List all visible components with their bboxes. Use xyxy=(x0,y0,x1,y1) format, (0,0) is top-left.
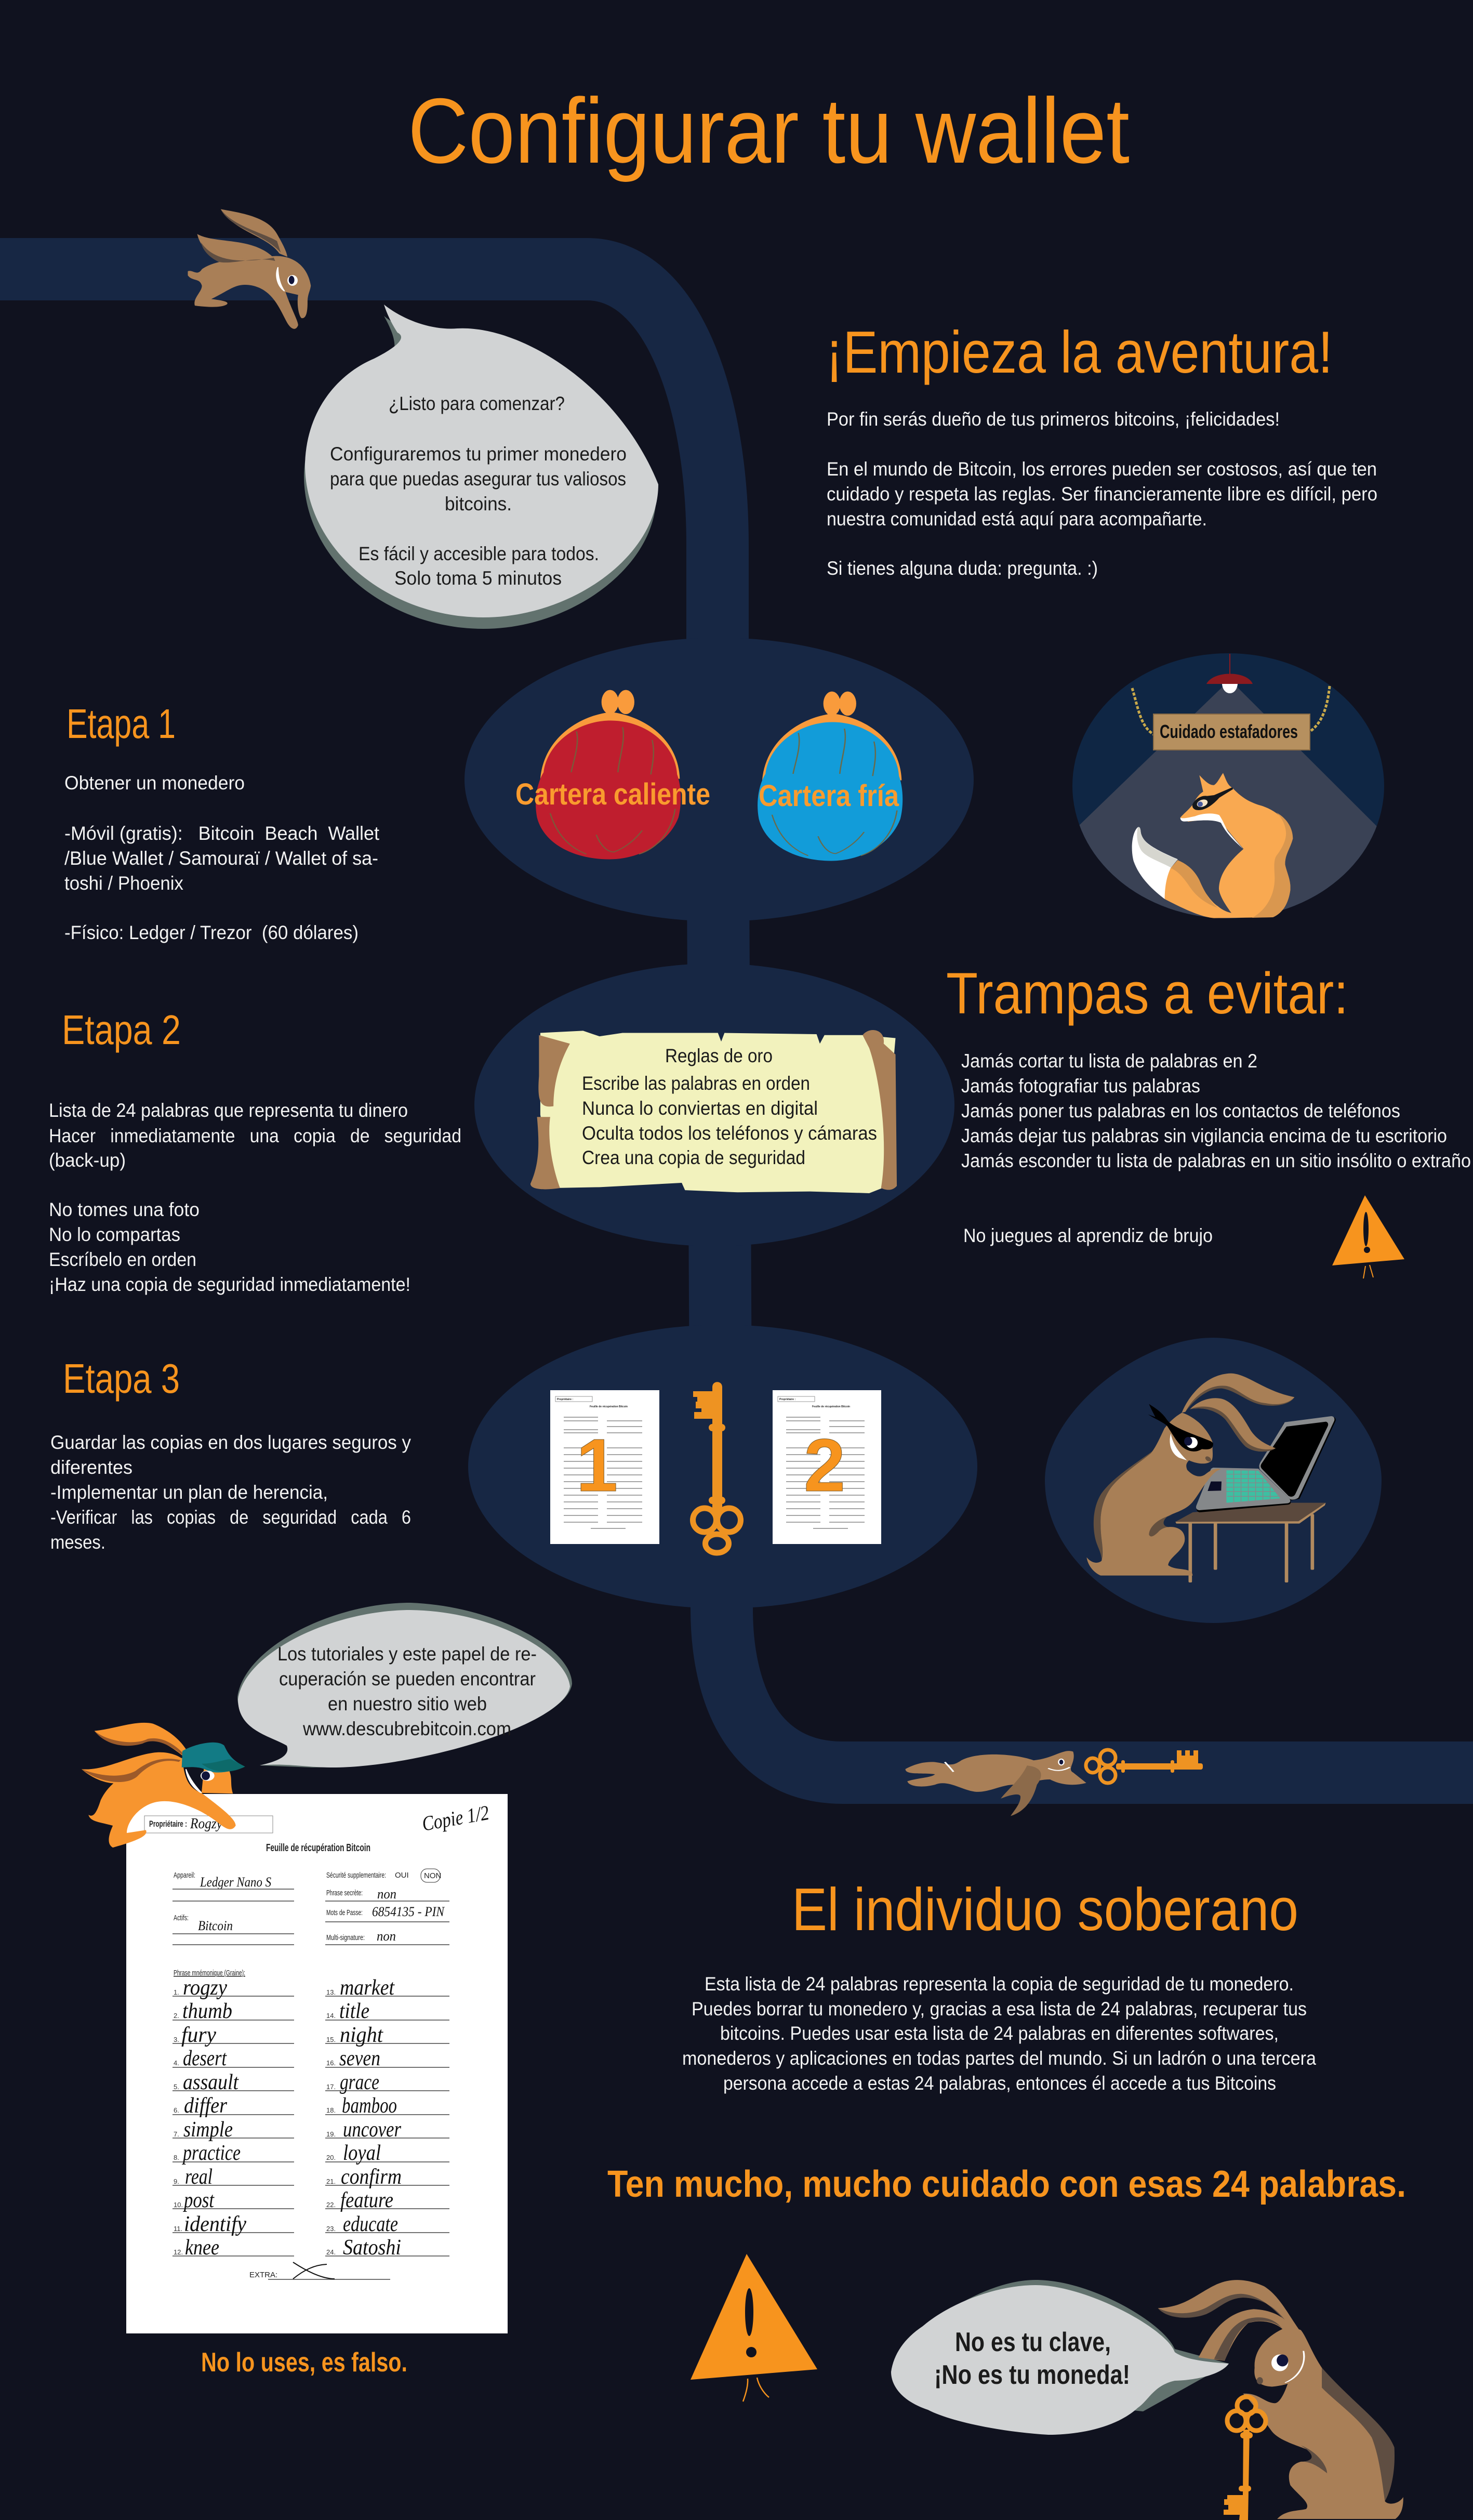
extra line: EXTRA: xyxy=(249,2271,277,2279)
text block: seed explanation: bitcoins. Puedes usar esta lista de 24 palabras en diferentes softwares, xyxy=(720,2023,1279,2044)
sign xyxy=(1153,714,1310,750)
seed words: fury xyxy=(181,2023,216,2047)
mini sheet 2: Propriétaire : xyxy=(779,1398,795,1401)
text block: Etapa 2: No lo compartas xyxy=(49,1224,180,1245)
seed numbers: 7. xyxy=(174,2130,179,2138)
text block: Etapa 3: Guardar las copias en dos lugares seguros y xyxy=(50,1432,411,1453)
bubble text: ¡No es tu moneda! xyxy=(934,2360,1130,2390)
rabbit xyxy=(1086,1374,1294,1576)
sheet fields: Appareil: xyxy=(174,1871,195,1880)
seed words: thumb xyxy=(182,1999,232,2023)
text block: traps list: No juegues al aprendiz de brujo xyxy=(963,1225,1213,1246)
seed words: educate xyxy=(343,2212,398,2236)
panel: scammer warning circle xyxy=(1070,653,1392,935)
sheet fields: Mots de Passe: xyxy=(326,1908,363,1917)
speech bubble: intro xyxy=(304,305,658,629)
text block: seed explanation: Puedes borrar tu monedero y, gracias a esa lista de 24 palabras, recuperar tus xyxy=(692,1998,1307,2020)
seed numbers: 21. xyxy=(326,2178,336,2185)
seed words: knee xyxy=(185,2236,219,2260)
text block: Etapa 1: -Físico: Ledger / Trezor (60 dólares) xyxy=(64,922,359,943)
sheet fields: NON xyxy=(424,1871,441,1880)
bubble text: ¿Listo para comenzar? xyxy=(389,393,565,414)
seed words: loyal xyxy=(343,2141,381,2165)
icon: hacker rabbit at laptop xyxy=(1086,1374,1336,1582)
bubble text: para que puedas asegurar tus valiosos xyxy=(330,468,626,490)
seed numbers: 24. xyxy=(326,2248,336,2256)
bubble text: cuperación se pueden encontrar xyxy=(279,1668,536,1690)
text block: Etapa 1: toshi / Phoenix xyxy=(64,873,183,894)
icon: warning triangle large xyxy=(691,2254,817,2402)
sheet fields: Bitcoin xyxy=(198,1918,233,1933)
icon: warning triangle small xyxy=(1332,1195,1404,1278)
bubble text: Configuraremos tu primer monedero xyxy=(330,443,627,465)
panel: backups circle xyxy=(468,1325,977,1608)
bubble text: Es fácil y accesible para todos. xyxy=(359,543,599,564)
seed numbers: 3. xyxy=(174,2036,179,2043)
panel: fake recovery sheet xyxy=(126,1794,508,2333)
seed numbers: 11. xyxy=(174,2225,182,2233)
icon: orange rabbit with cap xyxy=(82,1723,245,1848)
speech bubble: not your keys xyxy=(891,2280,1229,2435)
seed words: market xyxy=(340,1976,395,2000)
seed numbers: 14. xyxy=(326,2012,336,2020)
seed words: post xyxy=(183,2188,215,2212)
bubble text: No es tu clave, xyxy=(955,2327,1111,2357)
owner box: Propriétaire : xyxy=(149,1819,187,1829)
heading: Etapa 3: Etapa 3 xyxy=(63,1355,180,1402)
sheet fields: 6854135 - PIN xyxy=(372,1904,445,1919)
seed words: confirm xyxy=(341,2165,402,2189)
scroll text: Escribe las palabras en orden xyxy=(582,1073,810,1094)
heading: Etapa 2: Etapa 2 xyxy=(62,1007,181,1053)
seed numbers: 17. xyxy=(326,2083,336,2091)
heading: El individuo soberano: El individuo soberano xyxy=(792,1876,1298,1943)
seed words: rogzy xyxy=(183,1976,227,2000)
sign: Cuidado estafadores xyxy=(1160,721,1298,742)
icon: red purse xyxy=(536,690,681,859)
owner box: Rogzy xyxy=(190,1816,223,1832)
seed words: real xyxy=(185,2165,213,2189)
sheet fields: Actifs: xyxy=(174,1914,189,1922)
table xyxy=(1175,1503,1326,1582)
intro text block: Por fin serás dueño de tus primeros bitcoins, ¡felicidades! xyxy=(827,408,1280,430)
text block: Etapa 3: meses. xyxy=(50,1532,105,1553)
icon: crawling rabbit with key xyxy=(906,1750,1203,1816)
bubble text: Los tutoriales y este papel de re- xyxy=(277,1643,537,1665)
extra line xyxy=(249,2262,335,2279)
icon: chains xyxy=(1132,686,1330,735)
seed numbers: 16. xyxy=(326,2059,336,2067)
seed numbers: 1. xyxy=(174,1988,179,1996)
mini sheet 1: Feuille de récupération Bitcoin xyxy=(590,1405,628,1408)
seed words: title xyxy=(339,1999,369,2023)
panel: hacker rabbit circle xyxy=(1045,1338,1382,1623)
scroll text xyxy=(582,1045,877,1168)
seed words: Satoshi xyxy=(343,2236,401,2260)
bubble text: www.descubrebitcoin.com xyxy=(302,1718,511,1739)
icon: blue purse xyxy=(758,692,903,861)
text block: Etapa 2: Lista de 24 palabras que representa tu dinero xyxy=(49,1100,408,1121)
text block: seed explanation xyxy=(682,1973,1316,2094)
seed numbers: 19. xyxy=(326,2130,336,2138)
seed words: seven xyxy=(339,2047,380,2070)
bubble text xyxy=(277,1643,537,1739)
text block: Etapa 2: ¡Haz una copia de seguridad inmediatamente! xyxy=(49,1274,410,1295)
seed numbers: 9. xyxy=(174,2178,179,2185)
bubble text xyxy=(330,393,627,589)
seed words: bamboo xyxy=(342,2094,397,2118)
seed numbers: 13. xyxy=(326,1988,336,1996)
seed numbers xyxy=(174,1988,336,2256)
icon: scroll xyxy=(530,1030,897,1193)
seed numbers: 23. xyxy=(326,2225,336,2233)
rabbit body xyxy=(906,1751,1086,1816)
text block: Etapa 1: /Blue Wallet / Samouraï / Wallet of sa- xyxy=(64,848,378,869)
rabbit body xyxy=(1158,2280,1403,2519)
seed numbers: 10. xyxy=(174,2201,183,2209)
intro text block xyxy=(827,408,1377,579)
number 1: 1 xyxy=(576,1423,618,1507)
key xyxy=(1224,2397,1266,2520)
seed words: simple xyxy=(183,2118,233,2142)
text block: Etapa 1: Obtener un monedero xyxy=(64,772,245,794)
label: hot wallet: Cartera caliente xyxy=(515,777,710,811)
panel: wallets circle xyxy=(465,638,974,921)
seed numbers: 15. xyxy=(326,2036,336,2043)
text block: Etapa 3 xyxy=(50,1432,411,1553)
text block: Etapa 1: -Móvil (gratis): Bitcoin Beach Wallet xyxy=(64,823,380,844)
text block: seed explanation: persona accede a estas 24 palabras, entonces él accede a tus Bitcoins xyxy=(723,2073,1276,2094)
number 2: 2 xyxy=(804,1423,845,1507)
seed words: practice xyxy=(182,2141,241,2165)
seed words: desert xyxy=(183,2047,227,2070)
bubble text: en nuestro sitio web xyxy=(328,1693,487,1714)
callout: careful with the 24 words: Ten mucho, mucho cuidado con esas 24 palabras. xyxy=(607,2163,1406,2205)
laptop xyxy=(1196,1416,1336,1512)
copy label: Copie 1/2 xyxy=(420,1801,491,1836)
sheet fields: Phrase secrète: xyxy=(326,1889,363,1897)
text block: Etapa 2: Hacer inmediatamente una copia de seguridad xyxy=(49,1125,461,1146)
scroll text: Oculta todos los teléfonos y cámaras xyxy=(582,1123,877,1144)
text block: Etapa 3: -Verificar las copias de seguridad cada 6 xyxy=(50,1507,411,1528)
seed words: feature xyxy=(340,2188,393,2212)
seed numbers: 22. xyxy=(326,2201,336,2209)
scroll text: Nunca lo conviertas en digital xyxy=(582,1098,818,1119)
intro text block: En el mundo de Bitcoin, los errores pueden ser costosos, así que ten xyxy=(827,458,1377,480)
bubble text: Solo toma 5 minutos xyxy=(394,568,562,589)
sheet fields: OUI xyxy=(395,1871,409,1880)
seed words: identify xyxy=(184,2212,246,2236)
text block: seed explanation: Esta lista de 24 palabras representa la copia de seguridad de tu monedero. xyxy=(705,1973,1294,1995)
text block: Etapa 3: -Implementar un plan de herencia, xyxy=(50,1482,328,1503)
text block: Etapa 2: No tomes una foto xyxy=(49,1199,200,1220)
icon: rabbit jumping top xyxy=(188,209,311,329)
bubble text xyxy=(934,2327,1130,2390)
text block: Etapa 2: Escríbelo en orden xyxy=(49,1249,196,1270)
mini sheet 1: Propriétaire : xyxy=(557,1398,573,1401)
seed numbers: 8. xyxy=(174,2154,179,2161)
key xyxy=(1086,1750,1203,1783)
text block: Etapa 2: (back-up) xyxy=(49,1150,126,1171)
seed numbers: 6. xyxy=(174,2106,179,2114)
sheet title: Feuille de récupération Bitcoin xyxy=(266,1842,370,1854)
sheet fields: non xyxy=(377,1886,396,1902)
text block: traps list xyxy=(961,1050,1471,1246)
intro text block: nuestra comunidad está aquí para acompañarte. xyxy=(827,508,1207,530)
text block: seed explanation: monederos y aplicaciones en todas partes del mundo. Si un ladrón o una tercera xyxy=(682,2048,1316,2069)
scroll text: Crea una copia de seguridad xyxy=(582,1147,805,1168)
text block: Etapa 2 xyxy=(49,1100,461,1295)
text block: Etapa 3: diferentes xyxy=(50,1457,132,1478)
title: Configurar tu wallet xyxy=(408,79,1130,182)
text block: traps list: Jamás poner tus palabras en los contactos de teléfonos xyxy=(961,1100,1400,1122)
seed words xyxy=(181,1976,402,2260)
icon: rabbit holding key xyxy=(1158,2280,1403,2520)
sheet fields: Sécurité supplementaire: xyxy=(326,1871,386,1880)
mini sheet 2: Feuille de récupération Bitcoin xyxy=(812,1405,850,1408)
sheet fields: non xyxy=(377,1929,396,1944)
seed words: uncover xyxy=(343,2118,402,2142)
intro text block: cuidado y respeta las reglas. Ser financieramente libre es difícil, pero xyxy=(827,483,1377,505)
icon: lamp xyxy=(1206,654,1253,693)
heading: Trampas a evitar: Trampas a evitar: xyxy=(946,961,1348,1026)
seed numbers: 18. xyxy=(326,2106,336,2114)
text block: traps list: Jamás fotografiar tus palabras xyxy=(961,1075,1200,1097)
speech bubble: tutorials xyxy=(237,1603,572,1767)
mini sheet 2 xyxy=(773,1390,881,1544)
seed words: grace xyxy=(340,2070,379,2094)
icon: masked fox xyxy=(1132,773,1293,918)
seed numbers: 5. xyxy=(174,2083,179,2091)
seed numbers: 20. xyxy=(326,2154,336,2161)
panel: golden rules circle xyxy=(474,964,954,1246)
path: winding trail xyxy=(0,269,1473,1773)
text block: Etapa 1 xyxy=(64,772,380,943)
seed words: night xyxy=(340,2023,383,2047)
sheet fields: Ledger Nano S xyxy=(200,1875,271,1890)
seed words: assault xyxy=(183,2070,239,2094)
seed numbers: 12. xyxy=(174,2248,183,2256)
seed numbers: 4. xyxy=(174,2059,179,2067)
sheet fields xyxy=(174,1869,445,1977)
seed numbers: 2. xyxy=(174,2012,179,2020)
heading: Empieza la aventura: ¡Empieza la aventura! xyxy=(826,320,1333,386)
seed words: differ xyxy=(184,2094,228,2118)
sheet fields: Multi-signature: xyxy=(326,1933,365,1942)
heading: Etapa 1: Etapa 1 xyxy=(67,701,176,747)
owner box xyxy=(144,1816,273,1833)
bubble text: bitcoins. xyxy=(445,493,512,514)
caption: fake sheet warning: No lo uses, es falso. xyxy=(201,2347,407,2378)
scroll text: Reglas de oro xyxy=(665,1045,773,1066)
label: cold wallet: Cartera fría xyxy=(759,779,899,813)
text block: traps list: Jamás cortar tu lista de palabras en 2 xyxy=(961,1050,1257,1072)
sheet fields: Phrase mnémonique (Graine): xyxy=(174,1969,245,1977)
intro text block: Si tienes alguna duda: pregunta. :) xyxy=(827,558,1098,579)
mini sheet 1 xyxy=(550,1390,659,1544)
icon: vertical key xyxy=(693,1382,741,1553)
